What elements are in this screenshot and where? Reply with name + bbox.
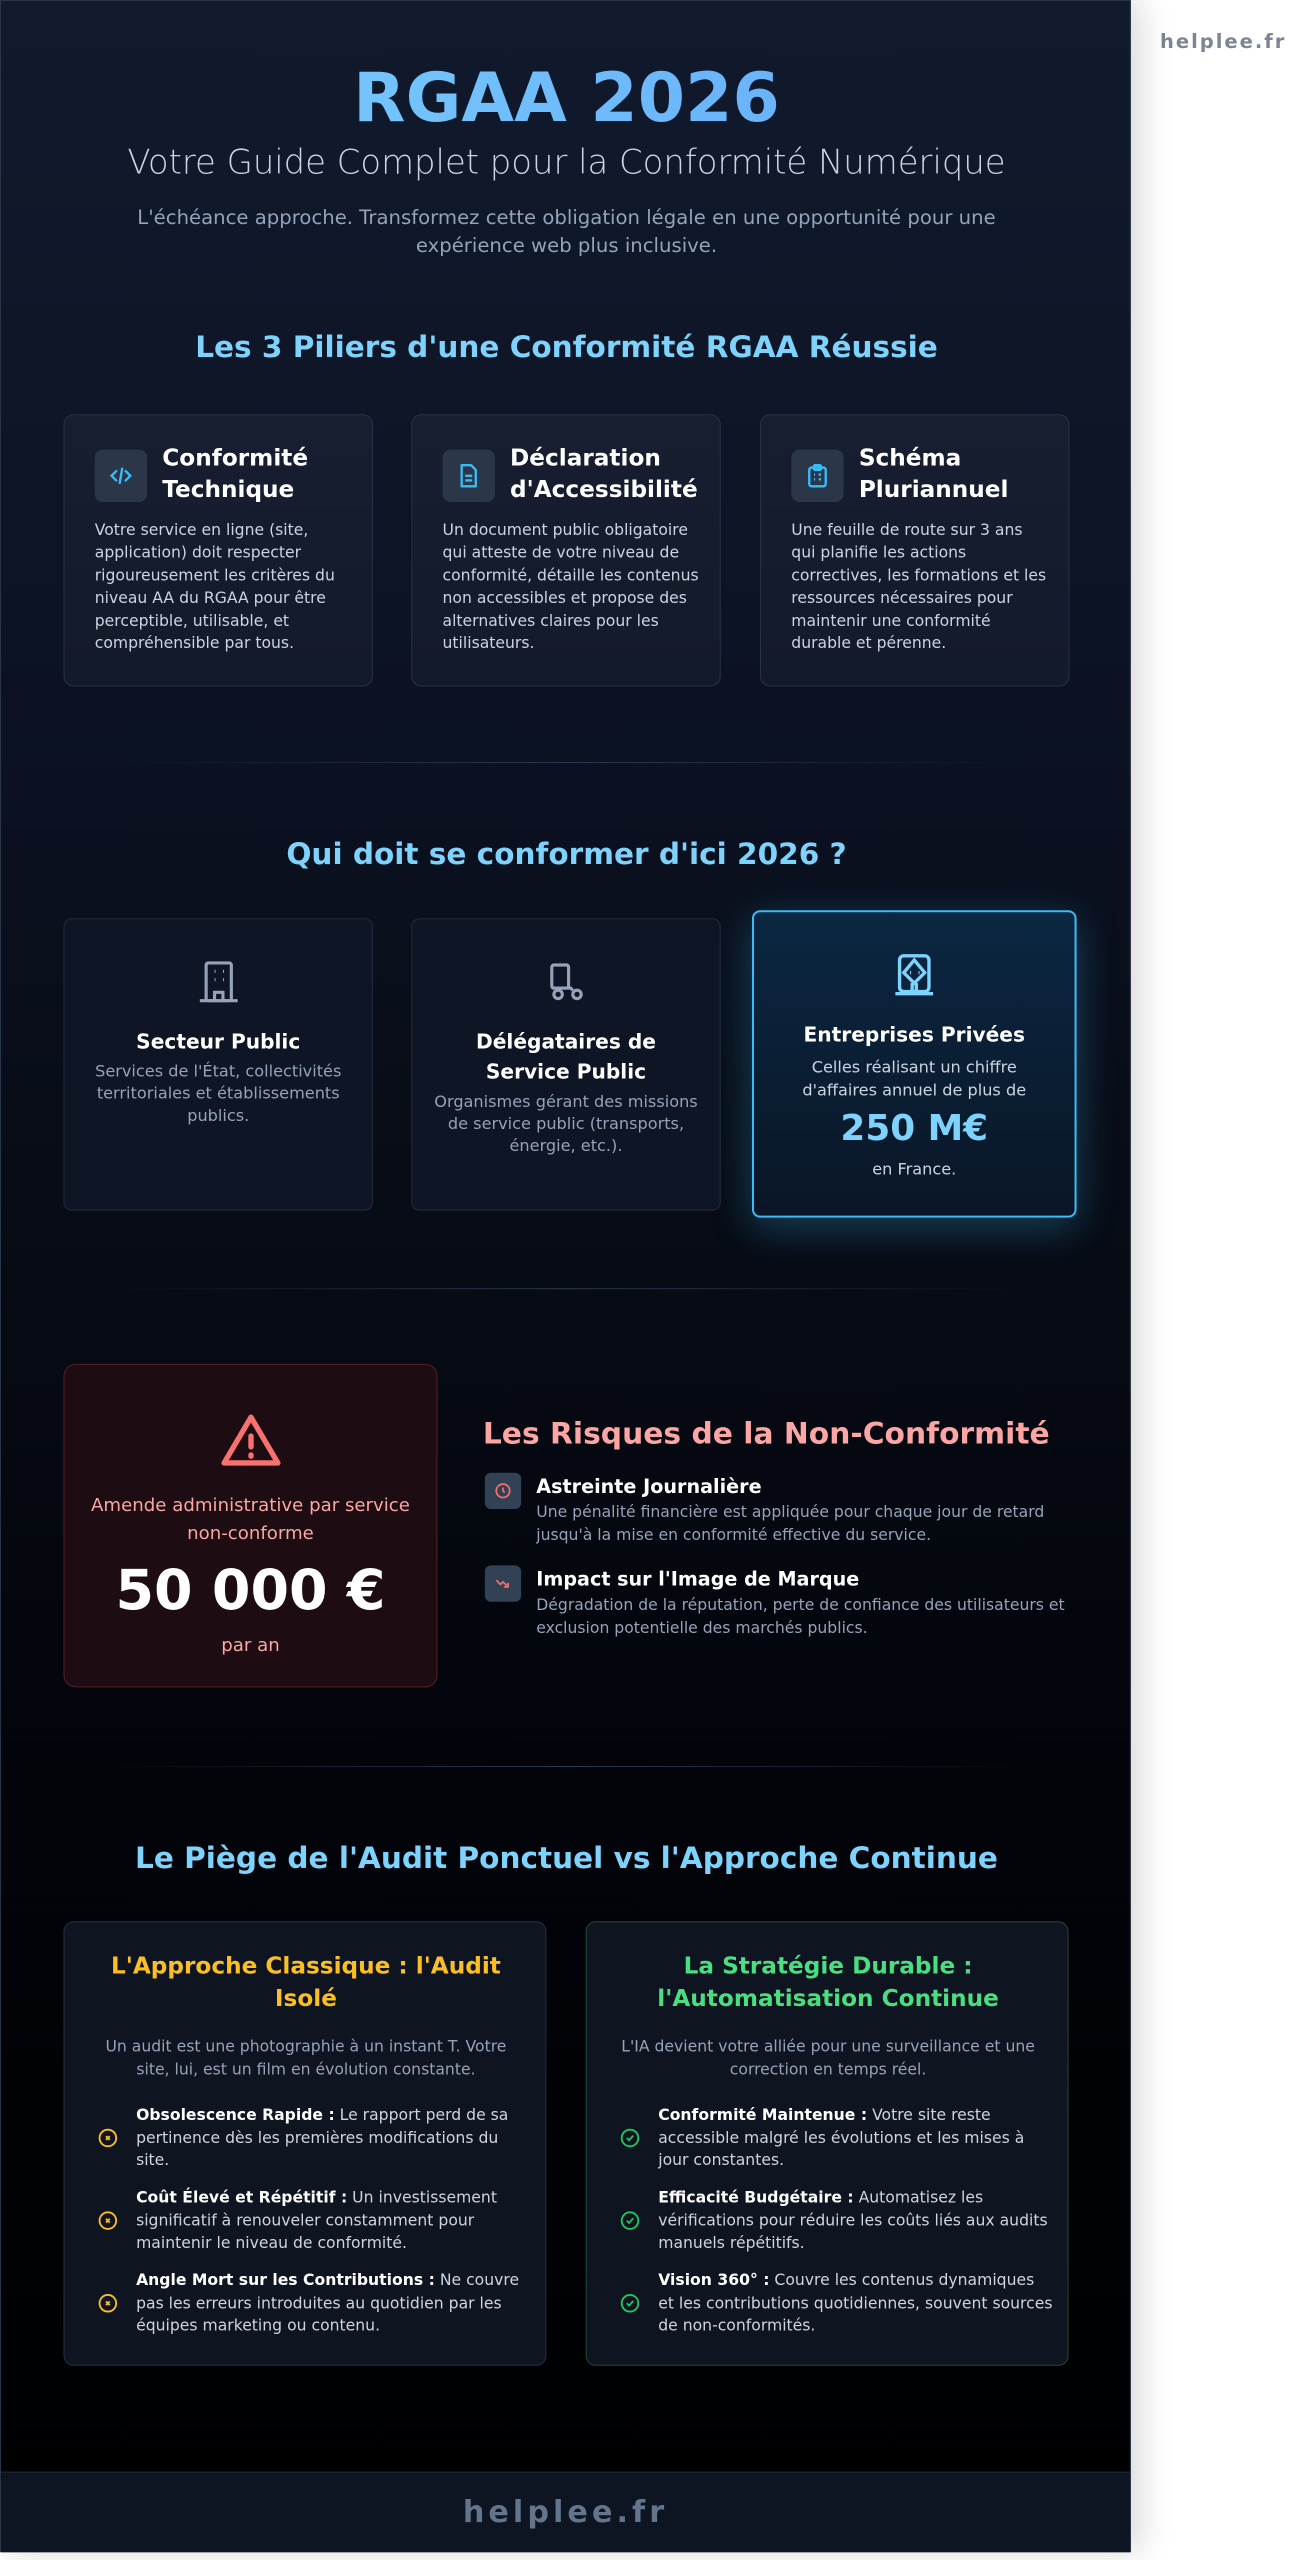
panel: entreprises privees (highlighted): 250 M€ [840, 1108, 988, 1149]
item: Angle Mort sur les Contributions : Ne couvre pas les erreurs introduites au quotidien par les équipes marketing ou contenu. [136, 2271, 519, 2335]
icon: check [620, 2128, 640, 2148]
panel: strategie durable: l'Automatisation Continue [657, 1986, 999, 2012]
item: et les contributions quotidiennes, souvent sources de non-conformités. [658, 2294, 1052, 2335]
icon: x [98, 2128, 118, 2148]
risk item 1: Astreinte Journalière [536, 1476, 762, 1498]
panel: approche classique [64, 1921, 546, 2366]
panel: pilier 3 [760, 414, 1069, 686]
panel: amende [64, 1364, 437, 1687]
item: Vision 360° : Couvre les contenus dynamiques [658, 2271, 1034, 2289]
panel: delegataires: Délégataires de [476, 1029, 656, 1053]
panel: strategie durable [586, 1921, 1068, 2366]
title [1, 55, 1132, 140]
heading: qui: Qui doit se conformer d'ici 2026 ? [286, 837, 847, 871]
panel: entreprises privees (highlighted): d'affaires annuel de plus de [802, 1081, 1026, 1100]
icon: x [98, 2294, 118, 2312]
icon: clock [485, 1473, 521, 1509]
intro text: L'échéance approche. Transformez cette obligation légale en une opportunité pour une expérience web plus inclusive. [137, 206, 996, 257]
icon: trend down [485, 1565, 521, 1602]
item: Efficacité Budgétaire : Automatisez les vérifications pour réduire les coûts liés aux audits manuels répétitifs. [658, 2188, 1048, 2252]
icon: enterprise [895, 954, 934, 996]
panel: entreprises privees (highlighted): Entreprises Privées [804, 1022, 1025, 1046]
icon: document [443, 450, 495, 502]
card text: Votre service en ligne (site, application) doit respecter rigoureusement les critères du niveau AA du RGAA pour être perceptible, utilisable, et compréhensible par tous. [95, 521, 335, 652]
card text: Une feuille de route sur 3 ans qui planifie les actions correctives, les formations et les ressources nécessaires pour maintenir une conformité durable et pérenne. [791, 521, 1046, 652]
panel: entreprises privees (highlighted) [752, 910, 1077, 1218]
icon: check [620, 2211, 640, 2230]
panel: secteur public: Secteur Public [136, 1029, 300, 1053]
card title: Pluriannuel [859, 477, 1008, 503]
title: RGAA 2026 [353, 57, 780, 137]
panel: secteur public [64, 918, 373, 1211]
footer [1, 2472, 1130, 2552]
icon: warning [221, 1414, 280, 1466]
risk item 2 [484, 1565, 1065, 1636]
panel: amende: par an [221, 1635, 280, 1656]
item: Coût Élevé et Répétitif : Un investissement significatif à renouveler constamment pour maintenir le niveau de conformité. [136, 2188, 497, 2252]
heading: risques: Les Risques de la Non-Conformité [483, 1416, 1050, 1451]
panel: amende: non-conforme [187, 1523, 314, 1544]
card title [162, 446, 308, 503]
card title: Conformité [162, 446, 308, 472]
item: Obsolescence Rapide : Le rapport perd de sa pertinence dès les premières modifications du site. [136, 2106, 508, 2170]
panel: pilier 1 [64, 414, 373, 686]
panel: delegataires: Organismes gérant des missions de service public (transports, énergie, etc.). [434, 1092, 698, 1155]
heading: piliers: Les 3 Piliers d'une Conformité RGAA Réussie [195, 330, 938, 364]
panel: amende: Amende administrative par service [91, 1495, 410, 1516]
panel: delegataires [411, 918, 721, 1211]
panel: amende: 50 000 € [115, 1557, 386, 1622]
top-right brand: helplee.fr [1160, 30, 1286, 53]
panel: entreprises privees (highlighted): Celles réalisant un chiffre [812, 1057, 1017, 1077]
item: Conformité Maintenue : Votre site reste accessible malgré les évolutions et les mises à jour constantes. [658, 2106, 1024, 2170]
item [658, 2271, 1052, 2335]
card title: Déclaration [510, 446, 661, 472]
icon: building [200, 961, 238, 1002]
panel: secteur public: Services de l'État, collectivités territoriales et établissements publics. [95, 1061, 341, 1125]
icon: truck [550, 963, 583, 1000]
panel: pilier 2 [411, 414, 721, 686]
panel: entreprises privees (highlighted): en France. [872, 1159, 956, 1178]
card title [510, 446, 698, 503]
icon: clipboard [791, 450, 844, 502]
heading: audit vs continu: Le Piège de l'Audit Ponctuel vs l'Approche Continue [135, 1841, 998, 1875]
card title: Schéma [859, 446, 961, 472]
subtitle: Votre Guide Complet pour la Conformité Numérique [127, 142, 1006, 181]
risk item 1 [484, 1472, 1044, 1544]
card title: d'Accessibilité [510, 477, 698, 503]
panel: approche classique: L'Approche Classique : l'Audit Isolé [111, 1954, 501, 2012]
panel: approche classique: Un audit est une photographie à un instant T. Votre site, lui, est un film en évolution constante. [105, 2037, 506, 2078]
footer: helplee.fr [463, 2495, 668, 2530]
risk item 1: Une pénalité financière est appliquée pour chaque jour de retard jusqu'à la mise en conformité effective du service. [536, 1503, 1044, 1544]
icon: check [620, 2294, 640, 2312]
icon: code [95, 450, 147, 502]
card text: Un document public obligatoire qui atteste de votre niveau de conformité, détaille les contenus non accessibles et propose des alternatives claires pour les utilisateurs. [443, 521, 699, 652]
panel: delegataires: Service Public [486, 1059, 646, 1084]
panel: strategie durable: La Stratégie Durable : [684, 1954, 973, 1980]
icon: x [98, 2211, 118, 2230]
risk item 2: Dégradation de la réputation, perte de confiance des utilisateurs et exclusion potentielle des marchés publics. [536, 1596, 1065, 1636]
panel: strategie durable: L'IA devient votre alliée pour une surveillance et une correction en temps réel. [621, 2037, 1035, 2078]
card title [859, 446, 1008, 503]
card title: Technique [162, 477, 294, 503]
risk item 2: Impact sur l'Image de Marque [536, 1568, 859, 1591]
